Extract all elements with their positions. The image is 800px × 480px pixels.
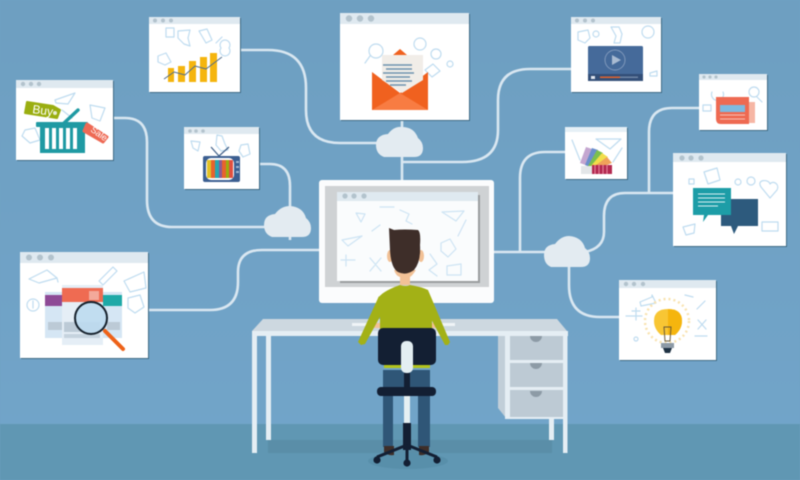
desk floor shadow xyxy=(268,440,552,453)
monitor xyxy=(319,180,494,303)
seat xyxy=(377,387,436,396)
floor shadow xyxy=(368,453,448,469)
on-screen window xyxy=(337,192,478,281)
tag: buy: Buy xyxy=(32,102,54,119)
cloud: left xyxy=(264,206,311,237)
window: light bulb xyxy=(619,280,717,361)
legs xyxy=(383,370,430,447)
icon: tv xyxy=(203,147,240,182)
arms xyxy=(358,296,381,345)
window: email xyxy=(340,13,470,121)
chair post xyxy=(401,341,413,373)
connector lines xyxy=(113,50,699,317)
window: newspaper xyxy=(699,74,768,131)
bar chart xyxy=(168,53,217,82)
window: search documents xyxy=(20,252,149,359)
head xyxy=(387,228,424,285)
window: chat xyxy=(673,153,787,247)
window: growth chart xyxy=(149,17,241,93)
chat bubble: dark xyxy=(721,199,758,234)
window: shopping basket xyxy=(16,80,114,161)
torso xyxy=(378,285,432,330)
drawers xyxy=(498,335,567,419)
chair back xyxy=(378,328,436,365)
chat bubble: teal xyxy=(693,188,731,222)
documents xyxy=(45,285,122,345)
window: colour palette xyxy=(565,127,628,180)
icon: bulb xyxy=(645,299,689,353)
trend line xyxy=(164,57,222,79)
icon: news xyxy=(716,97,755,124)
chair and legs xyxy=(368,328,448,469)
hands xyxy=(372,323,441,328)
floor xyxy=(0,424,800,480)
video screen xyxy=(588,46,643,81)
window: video player xyxy=(571,17,662,93)
chair base xyxy=(377,445,437,461)
person xyxy=(358,228,450,345)
desk xyxy=(252,319,568,453)
cloud: top xyxy=(376,127,423,157)
window: television xyxy=(184,127,260,190)
icon: magnifier xyxy=(75,302,123,349)
icon: palette fan xyxy=(580,147,612,174)
icon: envelope xyxy=(372,49,428,110)
cloud: right xyxy=(544,236,590,267)
tag: sale: Sale xyxy=(89,124,109,143)
icon: basket xyxy=(36,110,88,153)
keyboard xyxy=(352,323,455,326)
